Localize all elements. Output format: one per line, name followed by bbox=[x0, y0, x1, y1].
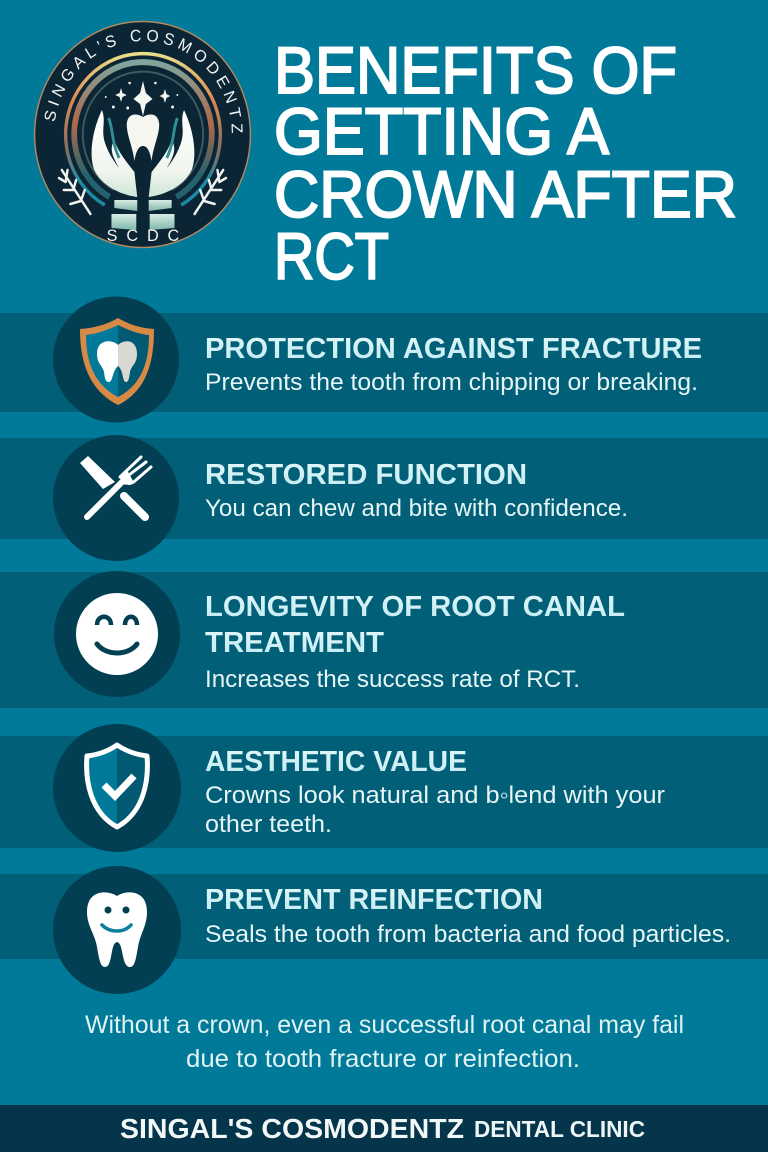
logo arcs bbox=[66, 54, 220, 205]
heading: AESTHETIC VALUE bbox=[205, 746, 467, 778]
panel: protection against fracture bbox=[0, 296, 768, 422]
clinic name: SINGAL'S COSMODENTZ bbox=[120, 1113, 464, 1144]
title bbox=[274, 33, 737, 293]
description: other teeth. bbox=[205, 811, 332, 838]
icon: shield with check bbox=[53, 724, 181, 852]
description bbox=[205, 782, 665, 838]
closing note: due to tooth fracture or reinfection. bbox=[186, 1045, 580, 1073]
closing note bbox=[85, 1011, 684, 1073]
heading: RESTORED FUNCTION bbox=[205, 459, 527, 491]
description: Crowns look natural and b◦lend with your bbox=[205, 782, 665, 809]
title: CROWN AFTER bbox=[274, 157, 737, 231]
logo initials: SCDC bbox=[107, 226, 179, 245]
logo stars bbox=[105, 81, 178, 116]
panel: prevent reinfection bbox=[0, 866, 768, 994]
title: BENEFITS OF bbox=[274, 33, 677, 107]
logo hands bbox=[92, 110, 194, 197]
heading: PROTECTION AGAINST FRACTURE bbox=[205, 333, 702, 365]
title: GETTING A bbox=[274, 94, 609, 168]
panel: aesthetic value bbox=[0, 724, 768, 852]
description: Seals the tooth from bacteria and food particles. bbox=[205, 921, 731, 948]
description: Prevents the tooth from chipping or breaking. bbox=[205, 369, 698, 396]
panel: longevity of root canal treatment: TREATMENT bbox=[205, 627, 384, 659]
icon: smiling face bbox=[54, 571, 180, 697]
clinic descriptor: DENTAL CLINIC bbox=[474, 1116, 645, 1142]
panel: longevity of root canal treatment bbox=[0, 571, 768, 708]
logo laurels bbox=[59, 170, 226, 214]
logo badge bbox=[34, 20, 252, 248]
heading: PREVENT REINFECTION bbox=[205, 884, 543, 916]
icon: knife and fork bbox=[53, 435, 179, 561]
closing note: Without a crown, even a successful root canal may fail bbox=[85, 1011, 684, 1039]
description: You can chew and bite with confidence. bbox=[205, 495, 628, 522]
footer bar bbox=[0, 1105, 768, 1152]
icon: smiling tooth bbox=[53, 866, 181, 994]
heading: LONGEVITY OF ROOT CANAL bbox=[205, 591, 625, 623]
logo tooth bbox=[127, 115, 159, 161]
panel: restored function bbox=[0, 435, 768, 561]
logo plinth bbox=[111, 200, 174, 230]
title: RCT bbox=[274, 219, 389, 293]
icon: shield with tooth bbox=[53, 296, 179, 422]
logo ring text: SINGAL'S COSMODENTZ bbox=[44, 30, 243, 133]
description: Increases the success rate of RCT. bbox=[205, 666, 580, 693]
